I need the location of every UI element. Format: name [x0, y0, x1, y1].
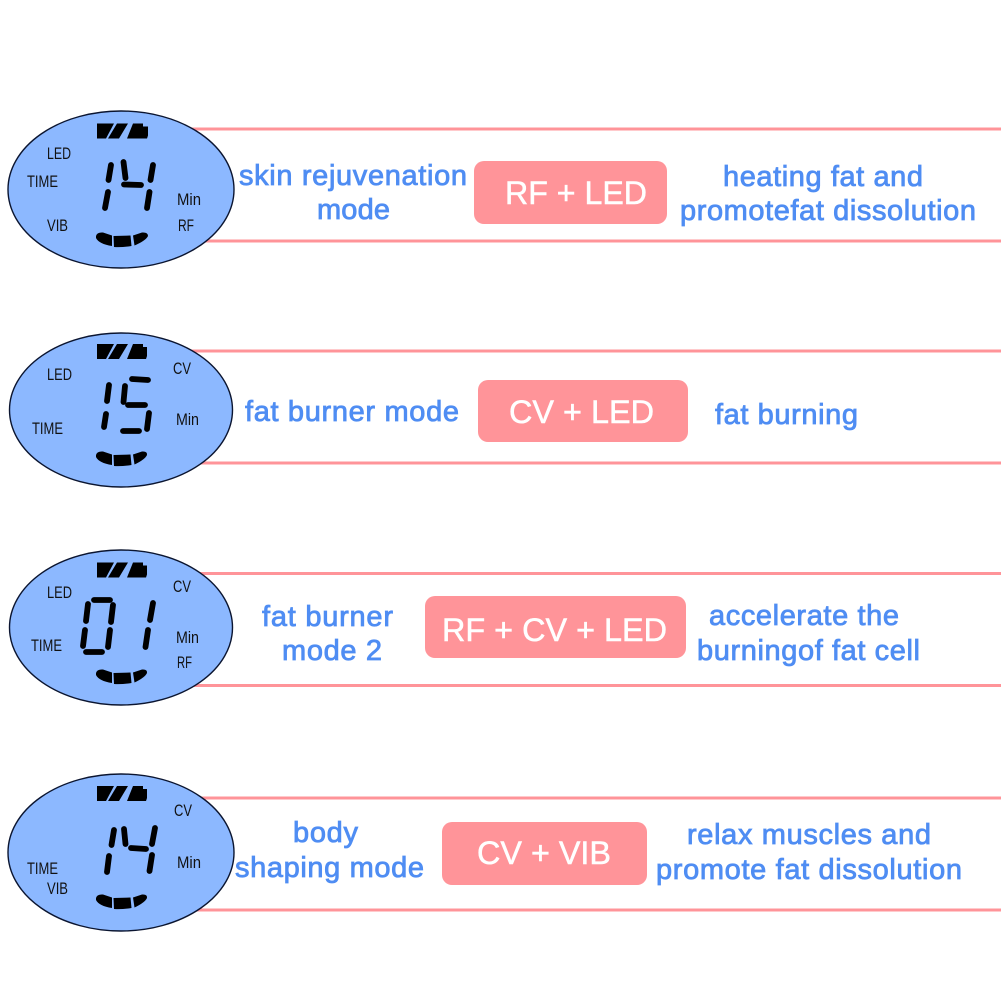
badge: CV + VIB [442, 822, 647, 885]
effect description: relax muscles and [687, 819, 931, 851]
icon: battery [97, 124, 148, 138]
LCD labels: VIB [47, 879, 68, 898]
LCD labels [31, 577, 199, 672]
effect description [680, 161, 976, 227]
badge: CV + VIB: CV + VIB [477, 835, 611, 871]
LCD labels: Min [177, 853, 201, 872]
badge: CV + LED: CV + LED [509, 394, 654, 430]
digits: 01 [83, 600, 153, 652]
panel: fat burner mode 2 [10, 550, 1001, 705]
icon: smile bar [96, 451, 147, 466]
mode name: skin rejuvenation [239, 160, 467, 192]
badge: CV + LED [478, 380, 688, 442]
panel: body shaping mode [8, 774, 1001, 931]
LCD display: 14 minutes, CV, VIB [8, 774, 234, 931]
effect description [656, 819, 962, 886]
effect description: heating fat and [723, 161, 923, 193]
LCD display: 14 minutes, LED, VIB, RF [8, 111, 234, 268]
mode name: body [293, 817, 358, 849]
LCD labels: RF [177, 653, 192, 672]
icon: smile bar [96, 894, 147, 909]
badge: RF + LED [474, 161, 667, 224]
effect description: promotefat dissolution [680, 195, 976, 227]
badge: RF + CV + LED: RF + CV + LED [442, 612, 667, 648]
effect description: burningof fat cell [697, 635, 920, 667]
LCD labels: LED [47, 144, 71, 163]
LCD labels: TIME [27, 172, 58, 191]
LCD labels [27, 801, 201, 898]
panel: skin rejuvenation mode [8, 111, 1001, 268]
icon: smile bar [96, 669, 147, 684]
effect description: accelerate the [709, 600, 899, 632]
badge: RF + CV + LED [425, 596, 686, 658]
LCD labels [27, 144, 201, 235]
icon: battery [97, 786, 147, 801]
LCD labels: CV [173, 577, 191, 596]
icon: battery [97, 562, 147, 578]
LCD display: 15 minutes, LED, CV [10, 333, 232, 487]
icon: battery [97, 344, 147, 359]
digits: 14 [107, 828, 155, 872]
badge: RF + LED: RF + LED [505, 175, 647, 211]
effect description: promote fat dissolution [656, 854, 962, 886]
mode name: mode [317, 194, 390, 226]
digits: 15 [104, 379, 149, 431]
mode name [262, 601, 393, 667]
mode name: fat burner mode [245, 396, 459, 428]
LCD labels: Min [176, 628, 199, 647]
LCD labels: TIME [27, 859, 58, 878]
effect description: fat burning [715, 399, 858, 431]
panel: fat burner mode [10, 333, 1001, 487]
LCD labels: TIME [31, 636, 62, 655]
LCD labels: RF [178, 216, 194, 235]
mode name [239, 160, 467, 226]
LCD labels: Min [177, 190, 201, 209]
LCD labels: CV [174, 801, 192, 820]
effect description [697, 600, 920, 667]
LCD display: 01 minute, LED, CV, RF [10, 550, 232, 705]
mode name: shaping mode [235, 852, 424, 884]
mode name: fat burner [262, 601, 393, 633]
LCD labels: LED [47, 365, 72, 384]
mode name: mode 2 [282, 635, 382, 667]
LCD labels: CV [173, 359, 191, 378]
mode name [235, 817, 424, 884]
digits: 14 [105, 162, 153, 208]
LCD labels: TIME [32, 419, 63, 438]
LCD labels: VIB [47, 216, 68, 235]
LCD labels: Min [176, 410, 199, 429]
LCD labels: LED [47, 583, 72, 602]
LCD labels [32, 359, 199, 438]
icon: smile bar [96, 232, 148, 247]
